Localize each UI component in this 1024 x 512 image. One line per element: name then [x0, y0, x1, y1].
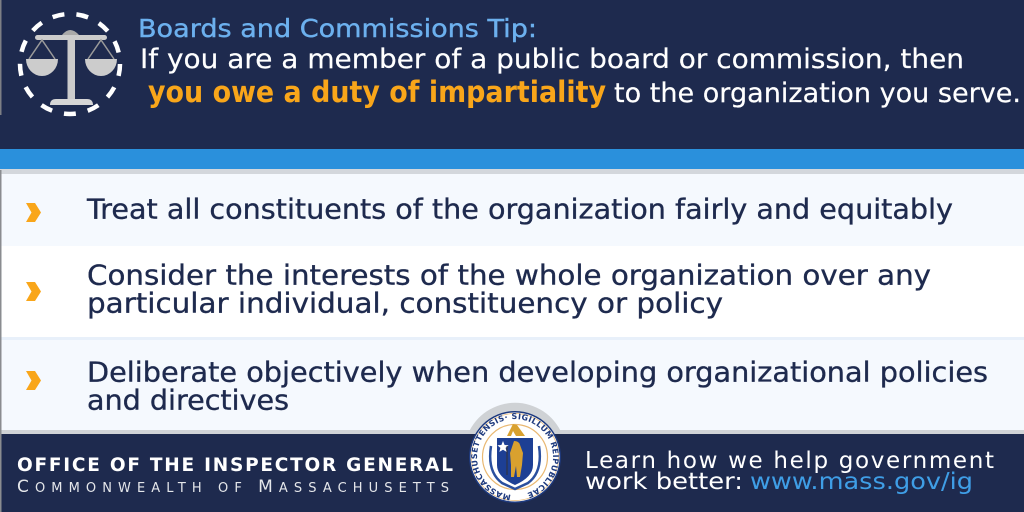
- icon: chevron row 3: [26, 371, 41, 390]
- text: call to action line 1: Learn how we help government: [585, 448, 994, 474]
- icon: chevron row 2: [26, 282, 41, 301]
- text: intro line 1: If you are a member of a public board or commission, then: [140, 44, 964, 75]
- heading: tip label: Boards and Commissions Tip:: [138, 14, 537, 43]
- panel: row 3 background: [0, 337, 1024, 430]
- grey band: [0, 169, 1024, 174]
- text: row 2: [87, 258, 931, 320]
- text: row 3: Deliberate objectively when developing organizational policies: [87, 356, 988, 388]
- text: call to action line 2: work better:: [585, 469, 743, 495]
- text: intro line 2 end: to the organization you serve.: [614, 78, 1021, 109]
- panel: footer background: [0, 434, 1024, 512]
- text: row 1: Treat all constituents of the organization fairly and equitably: [86, 192, 953, 226]
- text: row 3: and directives: [87, 384, 289, 416]
- text: row 3: [87, 356, 988, 416]
- icon: chevron row 1: [26, 203, 41, 222]
- text: row 2: particular individual, constituency or policy: [87, 286, 723, 320]
- text: intro emphasis: you owe a duty of impartiality: [148, 75, 606, 109]
- text: website link: www.mass.gov/ig: [750, 469, 973, 495]
- panel: header background: [0, 0, 1024, 150]
- icon: state seal: MASSACHUSETTENSIS· SIGILLUM REIPUBLICAE: [471, 413, 559, 500]
- text: commonwealth: C OMMONWEALTH OF M ASSACHUSETTS: [17, 477, 449, 497]
- panel: row 2 background: [0, 246, 1024, 337]
- text: row 2: Consider the interests of the whole organization over any: [87, 258, 931, 292]
- panel: row 1 background: [0, 174, 1024, 246]
- icon: scales of justice: [20, 14, 120, 114]
- text: office name: OFFICE OF THE INSPECTOR GENERAL: [17, 455, 453, 476]
- blue band: [0, 149, 1024, 169]
